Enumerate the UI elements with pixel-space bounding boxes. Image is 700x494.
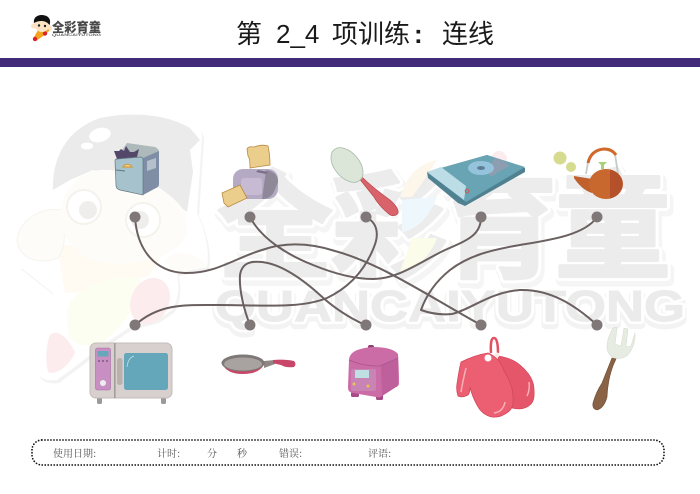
- icon: rice cooker: [348, 345, 399, 400]
- watermark hair: [53, 115, 200, 212]
- logo text: 全彩育童: [52, 17, 101, 36]
- icon: toaster and bread: [222, 145, 278, 207]
- line: pan to rice cooker: [240, 262, 365, 325]
- watermark: brand text: 童: [555, 134, 671, 302]
- footer labels: 错误:: [279, 445, 302, 460]
- watermark: pinyin text: QUANCAIYUTONG: [215, 282, 685, 331]
- line: fridge to mitts: [135, 217, 481, 325]
- watermark: brand text: 全: [217, 134, 333, 302]
- icon: frying pan: [222, 354, 296, 374]
- top connection dots: [130, 212, 602, 222]
- watermark: brand text: 育: [441, 134, 557, 302]
- footer box: [32, 440, 664, 465]
- footer labels: [53, 445, 391, 460]
- watermark: brand text: 彩: [331, 134, 447, 302]
- watermark: brand text: 育: [443, 138, 559, 306]
- watermark: coloured petals: [400, 151, 507, 272]
- watermark: brand text: 童: [555, 134, 671, 302]
- watermark: brand text: 育: [441, 134, 557, 302]
- footer labels: 评语:: [368, 445, 391, 460]
- footer labels: 分: [207, 445, 217, 460]
- bottom connection dots: [130, 320, 602, 330]
- title: 第: [236, 14, 262, 51]
- title: :: [414, 19, 423, 49]
- kettle steam: [554, 152, 576, 172]
- icon: microwave: [90, 343, 172, 404]
- icon: oven mitts: [457, 338, 534, 417]
- watermark face: [60, 170, 187, 263]
- watermark: pinyin text: QUANCAIYUTONG: [215, 286, 685, 335]
- title: 连线: [442, 14, 494, 51]
- watermark: mascot: [16, 107, 210, 383]
- title: 2_4: [276, 19, 319, 49]
- line: kettle to fork: [421, 217, 597, 325]
- watermark: brand text: 全: [219, 138, 335, 306]
- watermark: brand text: [217, 134, 673, 306]
- logo: [31, 15, 101, 41]
- watermark: brand text: 童: [557, 138, 673, 306]
- icon: fridge: [114, 143, 159, 195]
- watermark: brand text: 彩: [331, 134, 447, 302]
- icon: induction cooker: [427, 155, 525, 206]
- line: spoon to microwave: [135, 217, 377, 325]
- title: 项训练: [332, 14, 410, 51]
- connecting lines: [135, 217, 597, 325]
- watermark: brand text: 全: [217, 134, 333, 302]
- watermark body: [57, 245, 167, 293]
- icon: spoon: [325, 142, 398, 216]
- footer labels: 使用日期:: [53, 445, 96, 460]
- watermark hand left: [17, 210, 64, 261]
- watermark eyes: [67, 190, 160, 237]
- footer labels: 计时:: [157, 445, 180, 460]
- watermark hand right: [165, 253, 207, 273]
- watermark: brand text: 彩: [333, 138, 449, 306]
- footer labels: 秒: [237, 445, 248, 460]
- icon: fork: [593, 327, 635, 410]
- logo mascot: [31, 15, 52, 41]
- header bar: [0, 58, 700, 67]
- logo pinyin: QUANCAIYUTONG: [52, 32, 101, 37]
- watermark: pinyin text: QUANCAIYUTONG: [215, 282, 685, 331]
- icon: kettle: [554, 149, 623, 199]
- line: toaster to cooker: [250, 217, 481, 279]
